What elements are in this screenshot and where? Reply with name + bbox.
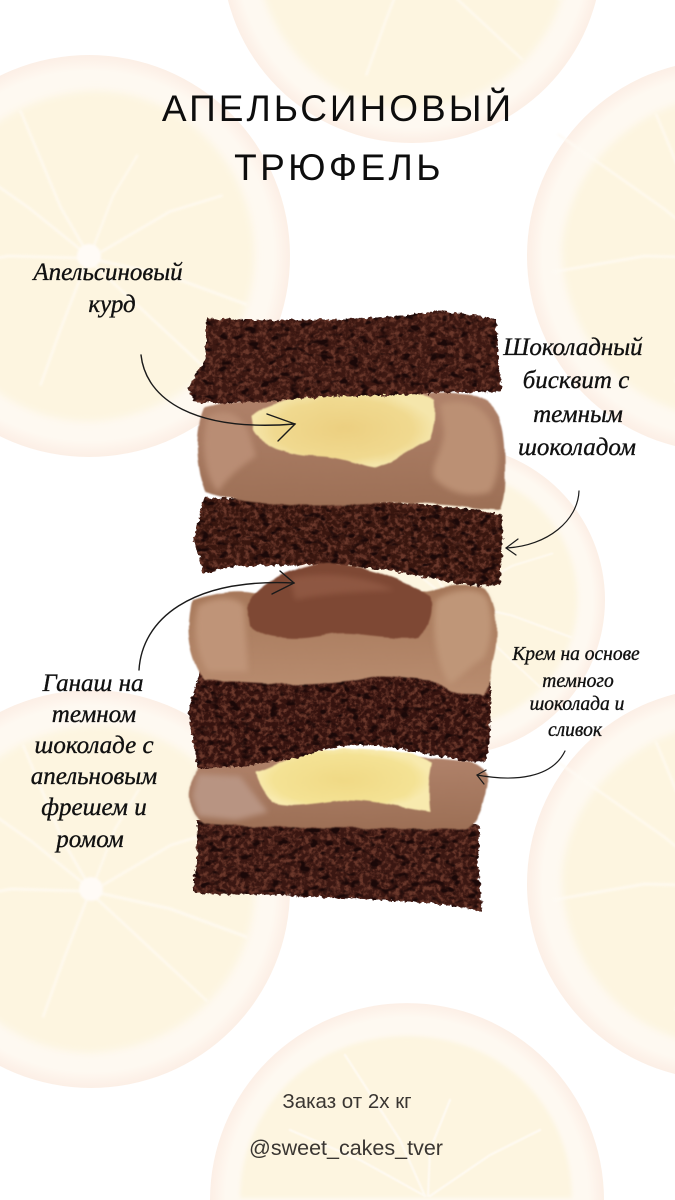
label: orange curd [31, 259, 183, 318]
orange slice: lower left [0, 690, 290, 1088]
arrow: sponge [506, 491, 579, 555]
cake photo [188, 312, 505, 912]
label: ganache: темном [52, 701, 136, 728]
title [162, 87, 514, 188]
title: ТРЮФЕЛЬ [234, 147, 444, 188]
label: cream: Крем на основе [511, 644, 640, 665]
orange slice: lower right [527, 688, 675, 1080]
label: cream [511, 644, 640, 741]
sponge layer 4 [192, 820, 482, 912]
cream layer 3 [189, 756, 487, 830]
sponge layer 3 [188, 670, 491, 768]
cream layer 1 [197, 393, 505, 510]
orange slice: bottom [210, 1003, 604, 1200]
cream layer 1 right swirl [433, 402, 498, 495]
cream layer 2 [188, 585, 497, 696]
label: chocolate sponge: бисквит с [523, 367, 629, 394]
cream layer 2 left lobe [195, 598, 248, 672]
orange slice: upper left [0, 55, 290, 457]
orange slice: top [222, 0, 602, 143]
orange slice: upper right [527, 60, 675, 452]
curd layer 1 [252, 390, 435, 468]
footer: order note: Заказ от 2х кг [282, 1090, 412, 1113]
curd layer 3 [256, 748, 432, 812]
label: cream: сливок [548, 720, 603, 741]
cream layer 2 right lobe [434, 590, 491, 684]
label: chocolate sponge [502, 334, 643, 461]
sponge layer 2 [194, 498, 503, 586]
label: ganache: апельновым [31, 763, 157, 790]
sponge layer 1 [188, 312, 502, 403]
arrow: ganache [139, 571, 294, 670]
footer: instagram handle: @sweet_cakes_tver [249, 1136, 443, 1160]
arrow: curd [141, 355, 295, 441]
title: АПЕЛЬСИНОВЫЙ [162, 87, 514, 129]
arrow: cream [477, 751, 565, 784]
label: ganache: ромом [54, 826, 124, 853]
label: orange curd: Апельсиновый [31, 259, 183, 286]
label: chocolate sponge: шоколадом [518, 434, 636, 461]
label: cream: шоколада и [530, 694, 625, 715]
label: cream: темного [542, 671, 614, 692]
cream layer 1 left highlight [204, 412, 256, 492]
label: chocolate sponge: темным [533, 401, 623, 428]
label: ganache: фрешем и [41, 794, 147, 821]
label: ganache: Ганаш на [41, 670, 144, 697]
label: ganache [31, 670, 157, 853]
ganache [247, 563, 431, 638]
label: orange curd: курд [88, 291, 136, 318]
label: ganache: шоколаде с [34, 732, 154, 759]
ganache fold [290, 575, 395, 600]
cream layer 3 light patch [192, 774, 268, 820]
orange slice: behind cake [295, 445, 605, 755]
label: chocolate sponge: Шоколадный [502, 334, 643, 361]
